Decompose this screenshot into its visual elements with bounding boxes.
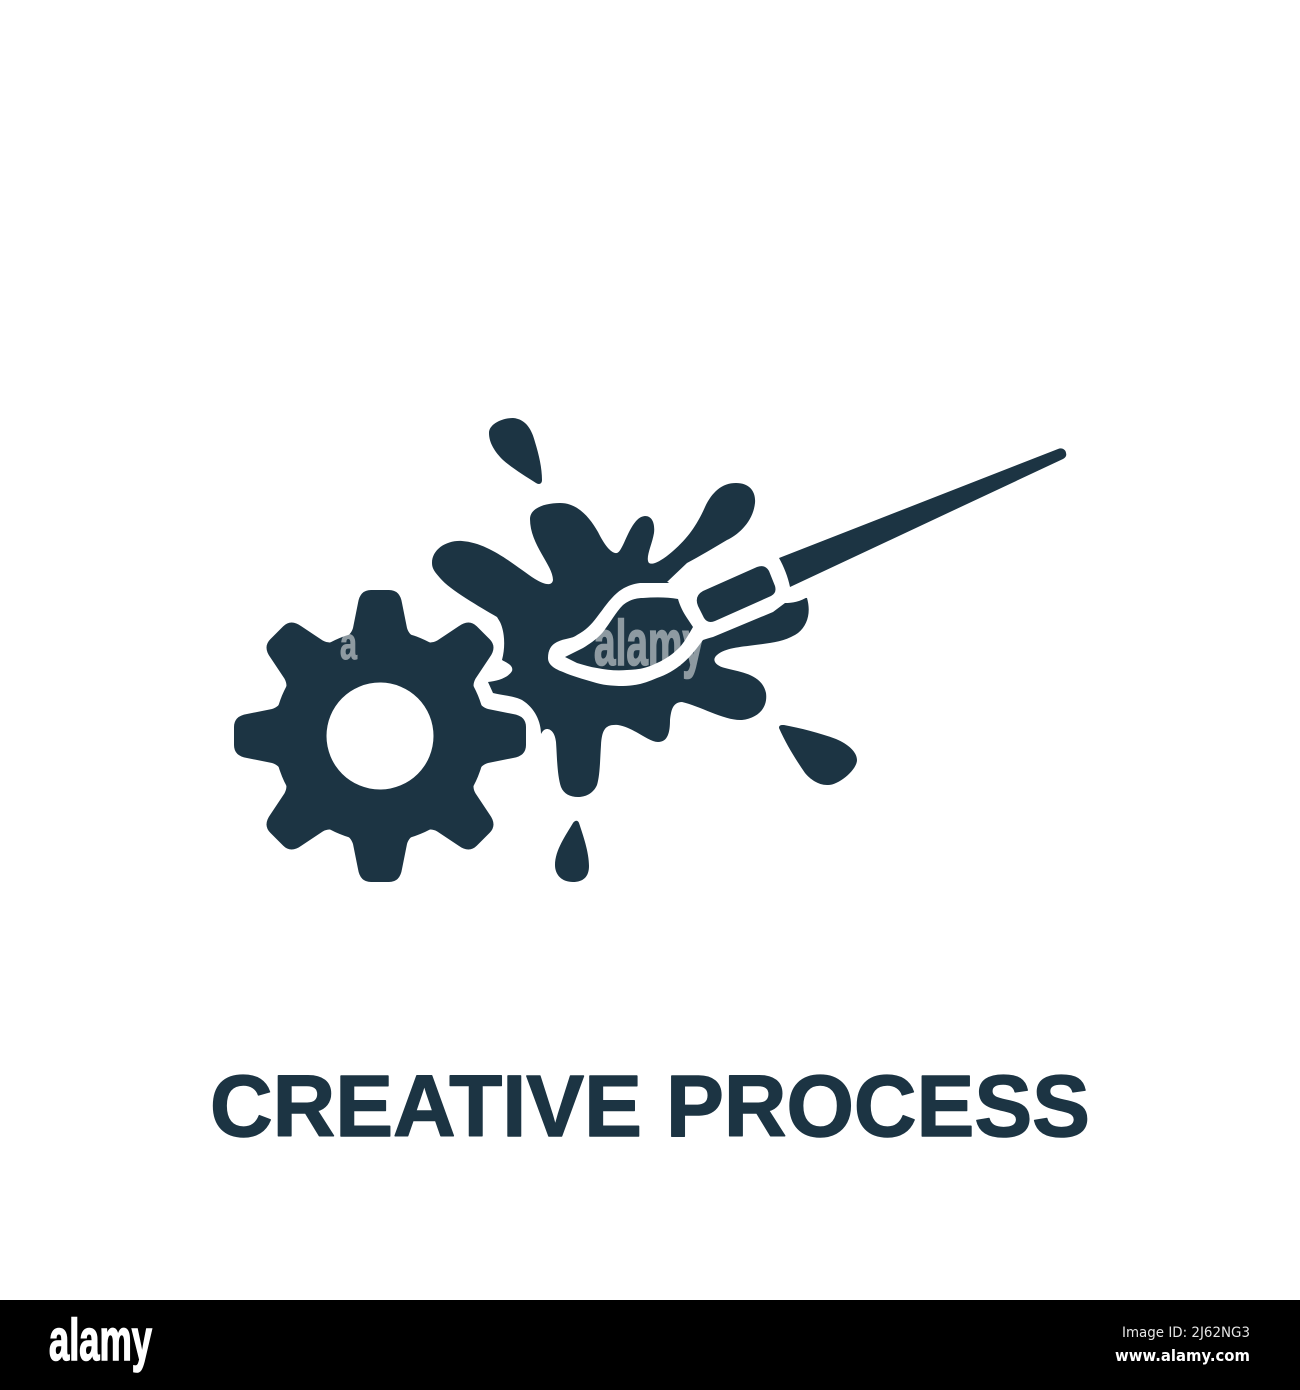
icon: gear — [234, 590, 526, 882]
watermark on brush: alamy — [594, 607, 704, 679]
image id: Image ID: 2J62NG3 — [1122, 1325, 1250, 1341]
watermark fragment on gear: a — [340, 618, 358, 669]
brush bristles — [565, 597, 693, 670]
icon: paint splash — [432, 483, 809, 797]
brush ferrule — [697, 566, 776, 622]
footer logo: alamy — [49, 1308, 152, 1373]
icon: creative process — [234, 418, 1066, 882]
icon: paint brush — [548, 448, 1066, 686]
footer bar — [0, 1300, 1300, 1390]
icon: right paint drop — [779, 725, 857, 785]
website: www.alamy.com — [1115, 1346, 1250, 1365]
brush handle — [779, 448, 1066, 587]
icon: top paint drop — [489, 418, 542, 484]
title: CREATIVE PROCESS — [210, 1058, 1090, 1155]
icon: bottom paint drop — [555, 821, 589, 882]
